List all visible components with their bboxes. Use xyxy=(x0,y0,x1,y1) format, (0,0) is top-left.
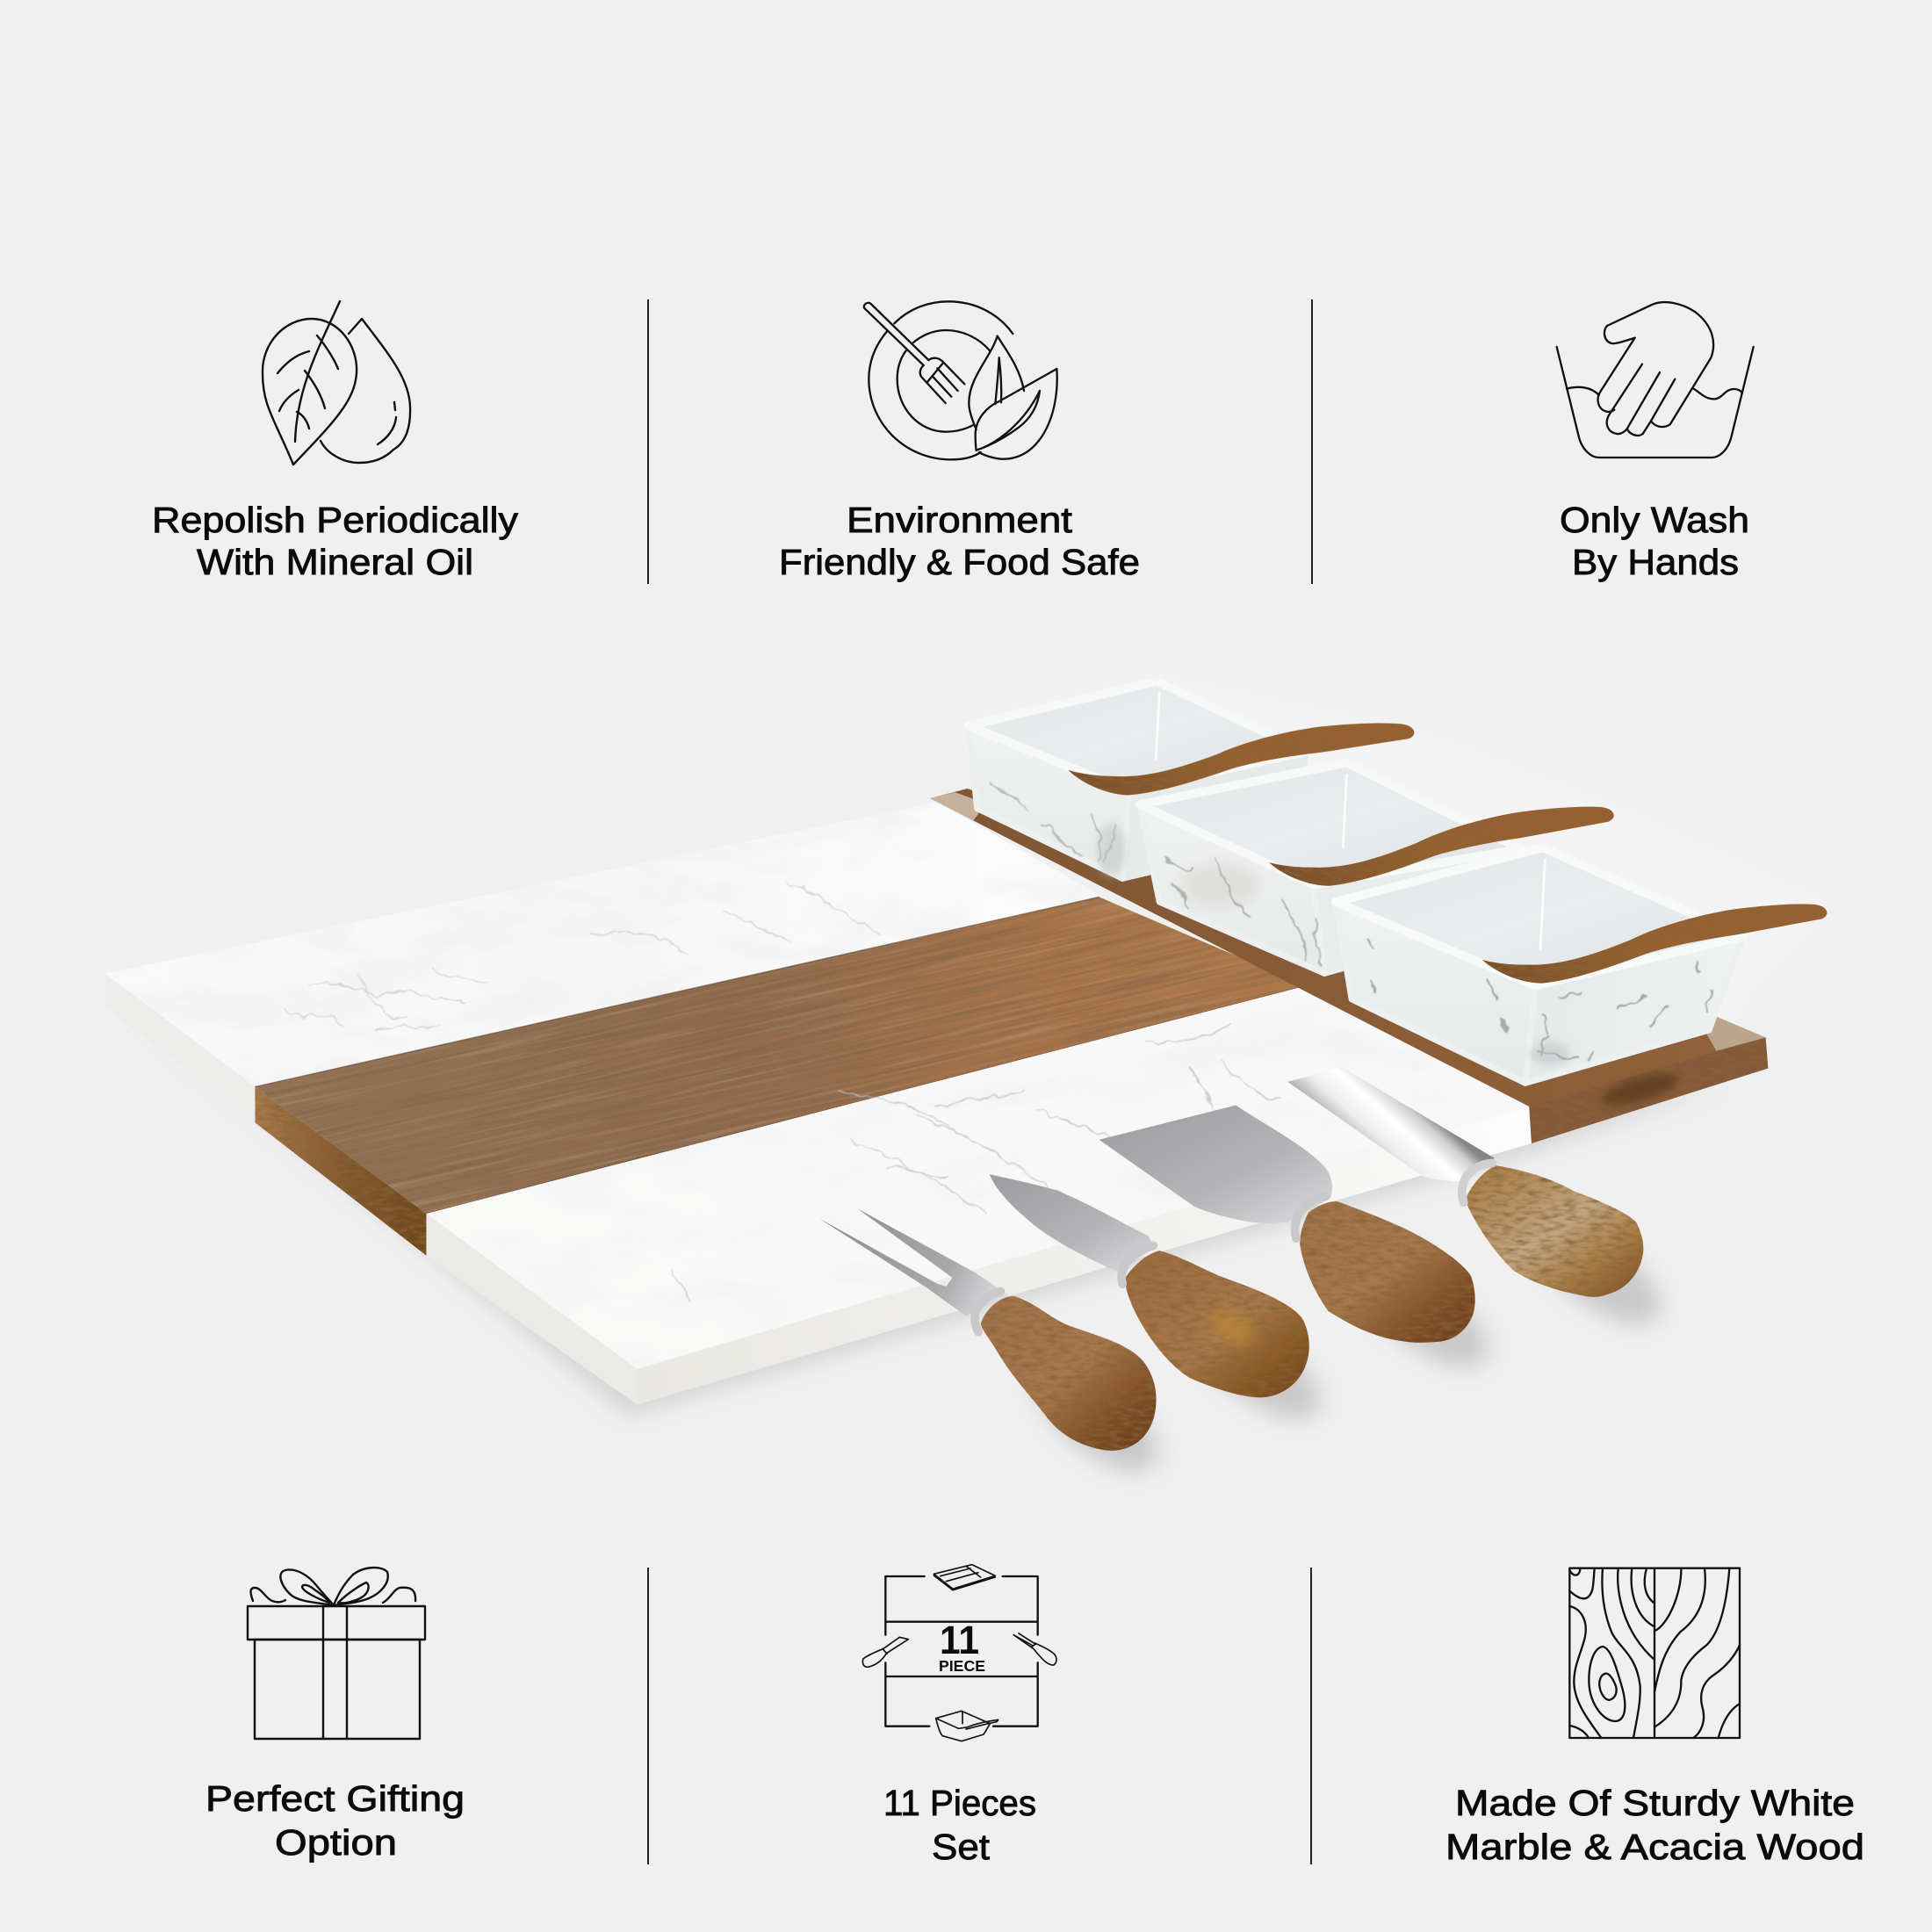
label: made of sturdy white marble and acacia wood: Marble & Acacia Wood xyxy=(1445,1827,1864,1867)
divider bottom left xyxy=(647,1568,649,1864)
cheese fork xyxy=(819,1208,1157,1451)
label: environment friendly and food safe: Friendly & Food Safe xyxy=(779,542,1140,582)
spoon xyxy=(1269,807,1614,886)
acacia wood tray xyxy=(930,789,1768,1143)
label: environment friendly and food safe: Environment xyxy=(847,500,1073,540)
feature: repolish with mineral oil xyxy=(152,301,519,582)
feature: environment friendly and food safe xyxy=(779,301,1140,582)
label: 11 pieces set: Set xyxy=(932,1827,991,1867)
cheese knife shadows xyxy=(1018,1208,1676,1491)
board shadow xyxy=(123,1004,1725,1415)
bowl 1 with spoon xyxy=(969,681,1415,878)
label: repolish periodically with mineral oil: With Mineral Oil xyxy=(197,542,473,582)
label: repolish periodically with mineral oil xyxy=(152,500,519,582)
spoon xyxy=(1068,714,1415,804)
label: 11 pieces set: 11 Pieces xyxy=(883,1783,1036,1823)
marble and acacia serving board xyxy=(105,703,1540,1404)
label: perfect gifting option: Option xyxy=(275,1822,397,1863)
spoon xyxy=(1482,904,1827,984)
feature: sturdy white marble and acacia wood xyxy=(1445,1568,1864,1867)
label: perfect gifting option xyxy=(205,1778,465,1863)
icon: hand in wash basin xyxy=(1557,302,1754,458)
lower marble section xyxy=(419,973,1540,1404)
icon: plate with fork and leaves xyxy=(864,301,1057,459)
acacia wood stripe xyxy=(255,896,1298,1256)
feature: only wash by hands xyxy=(1557,302,1754,582)
label: made of sturdy white marble and acacia wood: Made Of Sturdy White xyxy=(1455,1783,1855,1823)
icon: wood grain square xyxy=(1569,1568,1740,1738)
bowl 3 with spoon xyxy=(1336,847,1827,1083)
feature: 11 pieces set xyxy=(862,1565,1056,1867)
icon: gift box xyxy=(248,1568,425,1739)
label: environment friendly and food safe xyxy=(779,500,1140,582)
label: perfect gifting option: Perfect Gifting xyxy=(205,1778,465,1819)
upper marble section xyxy=(105,803,1079,1085)
icon: 11 piece set diagram xyxy=(862,1565,1056,1741)
label: repolish periodically with mineral oil: Repolish Periodically xyxy=(152,500,519,540)
divider top left xyxy=(647,299,649,584)
feature: perfect gifting option xyxy=(205,1568,465,1863)
"11" numeral: 11 xyxy=(940,1618,979,1662)
label: 11 pieces set xyxy=(883,1783,1036,1867)
pointed cheese knife xyxy=(990,1174,1309,1397)
divider top right xyxy=(1311,299,1313,584)
divider bottom right xyxy=(1310,1568,1312,1864)
bowl glow xyxy=(967,678,1834,1085)
label: made of sturdy white marble and acacia wood xyxy=(1445,1783,1864,1867)
icon: two leaves xyxy=(263,301,410,465)
straight cheese knife xyxy=(1287,1067,1643,1297)
"PIECE" label: PIECE xyxy=(939,1657,985,1675)
cheese spreader xyxy=(1099,1106,1475,1343)
bowl 2 with spoon xyxy=(1140,762,1614,973)
label: only wash by hands xyxy=(1560,500,1749,582)
label: only wash by hands: Only Wash xyxy=(1560,500,1749,540)
product photo: board, tray, bowls and cheese knives xyxy=(105,678,1834,1491)
label: only wash by hands: By Hands xyxy=(1572,542,1739,582)
